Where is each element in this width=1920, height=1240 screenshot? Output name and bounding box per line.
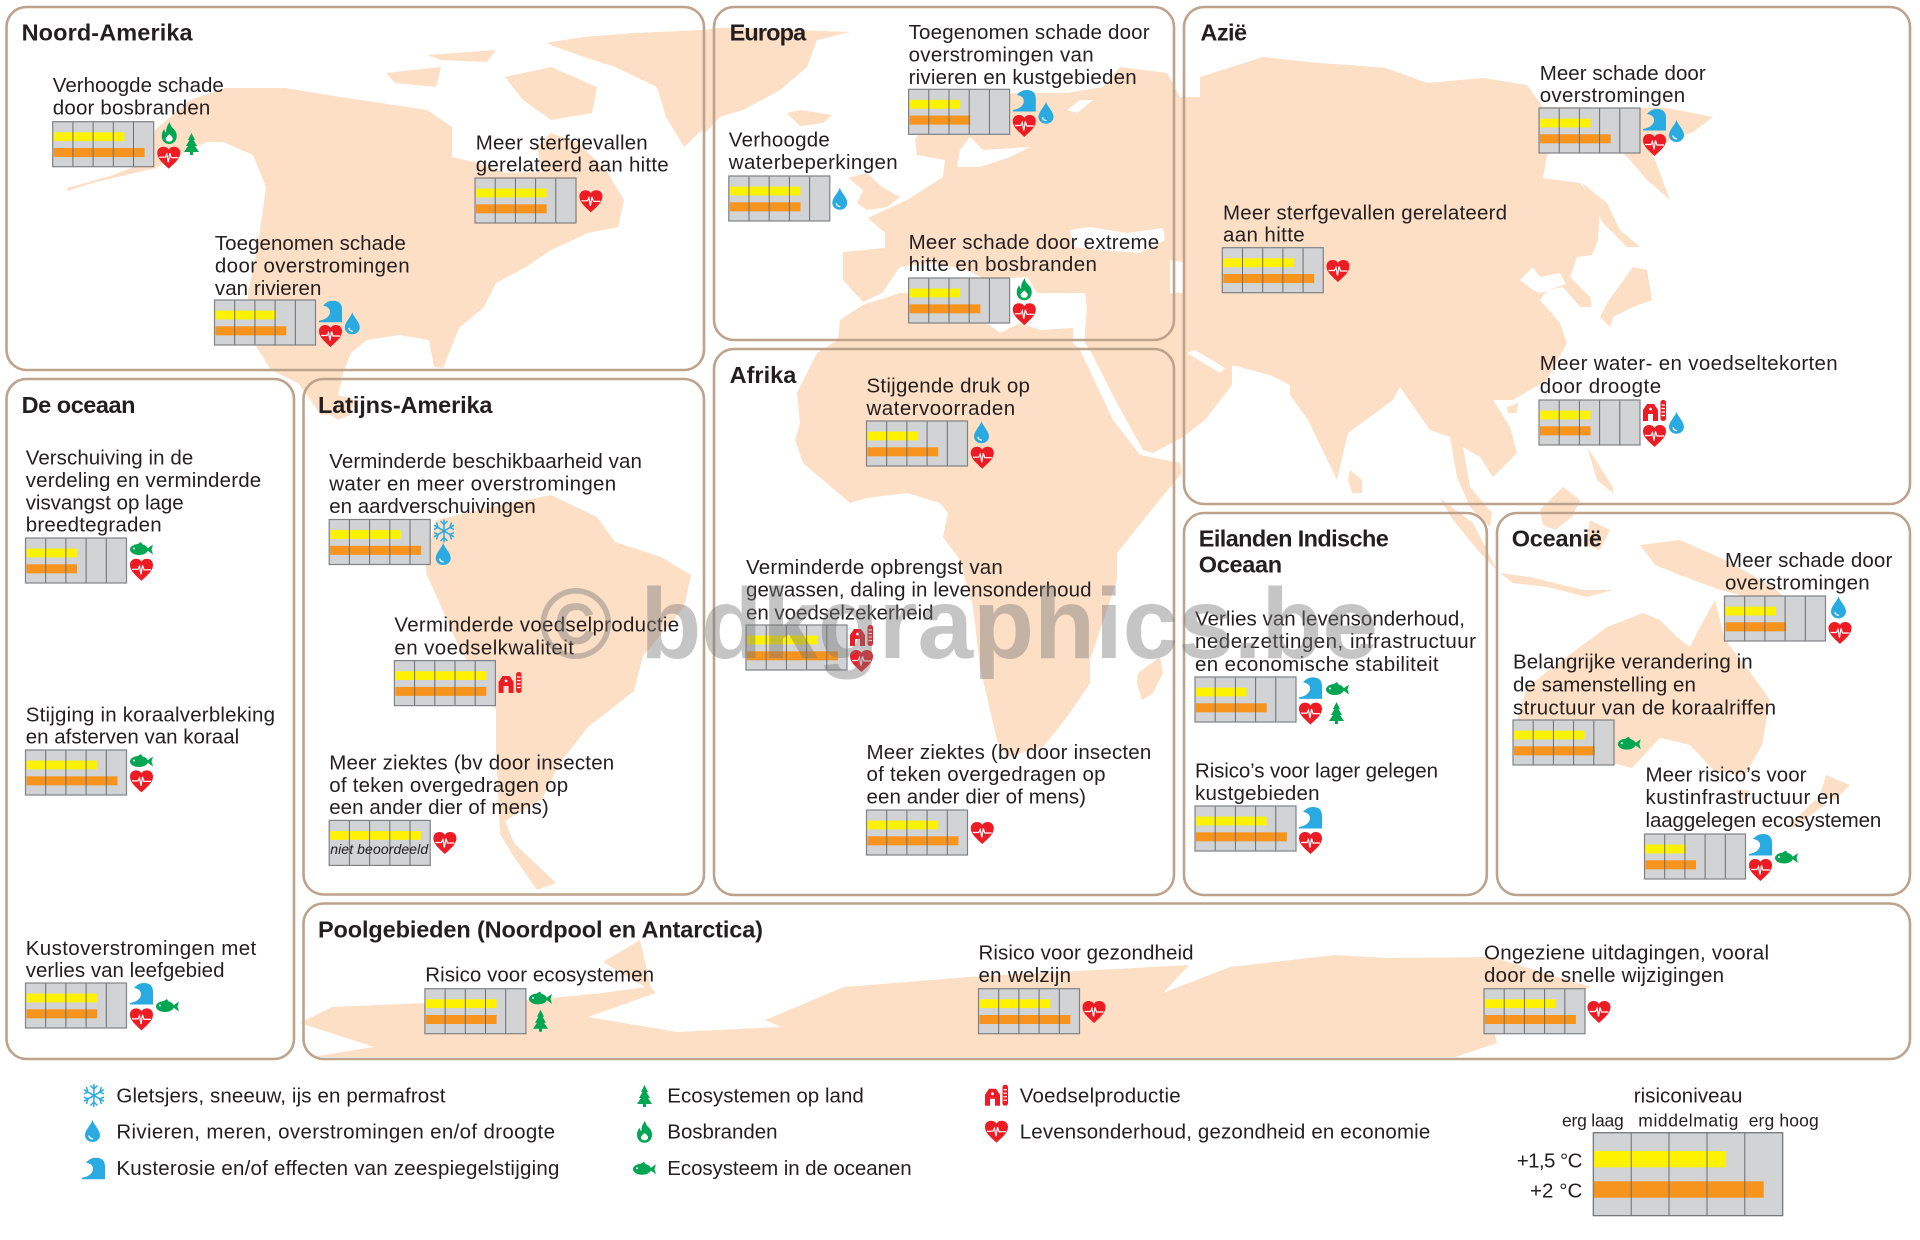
scale labels: middelmatig [1638, 1111, 1738, 1131]
text: kustinfrastructuur [1646, 763, 1881, 832]
icon: flame [637, 1121, 652, 1143]
text: hitte: gerelateerd aan hitte [476, 154, 669, 177]
chart: overstromingen [214, 300, 316, 345]
text: rivieren en kustgebieden: Toegenomen schade door [909, 21, 1150, 44]
risk item: ziektes [329, 752, 614, 865]
icon: drop [1831, 596, 1846, 618]
text: koraal: Stijging in koraalverbleking [26, 703, 275, 726]
text: visvangst: visvangst op lage [26, 491, 184, 514]
map: Arctic islands [386, 50, 597, 120]
chart: gezondheid [978, 989, 1080, 1034]
risk item: overstromingen [1724, 549, 1892, 644]
map: North America [67, 88, 624, 420]
chart: opbrengst van gewassen [746, 625, 847, 670]
text: waterbeperkingen: waterbeperkingen [728, 151, 898, 174]
icon: heart [130, 559, 153, 581]
icon: heart [1588, 1001, 1610, 1023]
icon: drop [974, 421, 989, 443]
text: bosbranden: door bosbranden [53, 97, 210, 120]
risk item: kustinfrastructuur [1644, 763, 1881, 881]
text: overstromingen: Meer schade door [1725, 549, 1892, 572]
text: overstromingen [215, 232, 410, 300]
text: kustgebieden [1195, 759, 1438, 805]
icon: heart [157, 147, 180, 169]
text: overstromingen: van rivieren [215, 277, 321, 300]
icon: fish [1618, 737, 1641, 750]
text: watervoorraden: Stijgende druk op [866, 374, 1030, 397]
map: Iceland and United Kingdom [787, 110, 900, 210]
icon: heart [971, 822, 994, 844]
text: overstromingen: overstromingen [1725, 572, 1870, 595]
legend label: Levensonderhoud, gezondheid en economie [1020, 1121, 1430, 1144]
icon: heart [319, 325, 342, 347]
scale labels: erg hoog [1749, 1111, 1819, 1131]
risk item: kustoverstromingen [26, 937, 256, 1030]
icon: wave [1013, 90, 1036, 112]
text: kustinfrastructuur: Meer risico’s voor [1646, 763, 1807, 786]
panel: De oceaan [6, 379, 294, 1059]
panel: Azië [1184, 7, 1910, 504]
icon: drop [1038, 102, 1054, 124]
icon: farm [1643, 400, 1666, 421]
legend title: risiconiveau [1634, 1085, 1742, 1108]
risk item: bosbranden [53, 74, 224, 169]
map: Greenland [546, 28, 850, 147]
chart: ziektes [329, 820, 430, 865]
risk item: koraalriffen [1513, 650, 1776, 765]
heading: Eilanden Indische Oceaan: Eilanden Indische [1199, 525, 1389, 551]
text: beschikbaarheid water: Verminderde beschikbaarheid van [329, 450, 642, 473]
text: gezondheid [978, 942, 1194, 987]
text: uitdagingen: Ongeziene uitdagingen, vooral [1484, 942, 1769, 964]
text: extreme hitte [909, 231, 1159, 276]
text: extreme hitte: Meer schade door extreme [909, 231, 1159, 254]
text: ziektes: of teken overgedragen op [329, 774, 568, 797]
risk item: visvangst [26, 447, 261, 583]
icon: snowflake [84, 1084, 104, 1107]
icon: heart [1326, 260, 1350, 282]
text: beschikbaarheid water: en aardverschuivingen [329, 495, 536, 518]
heading: Azië: Azië [1200, 20, 1247, 46]
risk item: hitte [1222, 201, 1507, 293]
icon: heart [1643, 134, 1666, 156]
icon: heart [579, 190, 602, 212]
chart: hitte [1222, 248, 1323, 293]
chart: ziektes [866, 810, 968, 855]
chart: waterbeperkingen [729, 176, 830, 221]
icon: heart [1749, 859, 1772, 881]
map: Indonesia and New Guinea [1440, 487, 1800, 610]
icon: flame [1017, 278, 1032, 300]
chart: overstromingen [1724, 596, 1826, 641]
map: inland seas [957, 100, 1566, 373]
scale labels [1562, 1111, 1819, 1131]
chart: extreme hitte [909, 278, 1010, 323]
text: opbrengst van gewassen: en voedselzekerheid [746, 601, 934, 624]
panel: Noord-Amerika [6, 7, 704, 370]
text: waterbeperkingen [728, 129, 898, 174]
text: watervoorraden: watervoorraden [866, 397, 1015, 420]
risk item: overstromingen [1539, 62, 1706, 156]
icon: wave [1299, 677, 1322, 699]
map: Eurasia [843, 57, 1713, 527]
text: overstromingen: door overstromingen [215, 254, 410, 277]
text: voedselproductie: Verminderde voedselproductie [394, 614, 679, 637]
icon: drop [1669, 412, 1684, 434]
text: kustinfrastructuur: laaggelegen ecosystemen [1646, 809, 1881, 832]
heading: Poolgebieden: Poolgebieden (Noordpool en Antarctica) [318, 917, 763, 943]
risk item: water- en voedseltekorten [1539, 352, 1838, 447]
risk item: watervoorraden [866, 374, 1030, 469]
text: hitte [1223, 201, 1507, 247]
chart: kustgebieden [1195, 806, 1296, 851]
text: visvangst: Verschuiving in de [26, 447, 193, 470]
text: koraalriffen: structuur van de koraalriffen [1513, 696, 1776, 719]
icon: drop [85, 1120, 100, 1142]
chart: koraal [26, 750, 126, 795]
legend chart [1593, 1133, 1783, 1216]
text: koraal [26, 703, 275, 749]
heading: Europa: Europa [730, 20, 807, 46]
chart: beschikbaarheid water [329, 520, 430, 564]
chart: kustoverstromingen [26, 983, 126, 1028]
chart: watervoorraden [866, 421, 968, 466]
text: water- en voedseltekorten: door droogte [1540, 375, 1661, 398]
chart: voedselproductie [394, 661, 495, 706]
text: overstromingen: Toegenomen schade [215, 232, 406, 255]
panel: Europa [714, 7, 1174, 340]
text: overstromingen: Meer schade door [1540, 62, 1706, 85]
text: beschikbaarheid water [328, 450, 642, 518]
text: voedselproductie: en voedselkwaliteit [394, 636, 574, 659]
icon: heart [1013, 303, 1036, 325]
heading: Latijns-Amerika: Latijns-Amerika [318, 392, 493, 418]
text: ecosystemen: Risico voor ecosystemen [425, 964, 654, 986]
risk item: ecosystemen [425, 964, 654, 1034]
text: koraalriffen: Belangrijke verandering in [1513, 650, 1753, 674]
chart: koraalriffen [1513, 720, 1614, 765]
text: ziektes: een ander dier of mens) [866, 786, 1086, 809]
icon: fish [130, 754, 153, 767]
text: opbrengst van gewassen: gewassen, daling in levensonderhoud [746, 578, 1092, 601]
chart: ecosystemen [425, 989, 526, 1034]
map: Australia and New Zealand [1517, 600, 1850, 830]
icon: drop [832, 188, 847, 210]
panel: Poolgebieden [304, 904, 1910, 1059]
heading: Eilanden Indische Oceaan [1199, 525, 1389, 578]
text: hitte: Meer sterfgevallen [476, 131, 648, 154]
text: kustinfrastructuur: kustinfrastructuur en [1646, 786, 1840, 809]
text: opbrengst van gewassen [746, 556, 1092, 624]
text: koraal: en afsterven van koraal [26, 726, 239, 749]
text: bosbranden [53, 74, 224, 120]
text: ziektes: of teken overgedragen op [866, 763, 1106, 786]
icon: tree [1329, 702, 1344, 724]
chart: uitdagingen [1484, 989, 1585, 1034]
text: rivieren en kustgebieden: overstromingen van [909, 44, 1094, 67]
risk item: hitte [475, 131, 669, 223]
icon: heart [130, 770, 153, 792]
text: gezondheid: en welzijn [978, 964, 1071, 987]
text: levensonderhoud: Verlies van levensonderhoud, [1195, 608, 1465, 631]
risk item: uitdagingen [1484, 942, 1769, 1034]
icon: drop [345, 312, 360, 334]
risk item: ziektes [866, 741, 1151, 855]
risk item: beschikbaarheid water [328, 450, 642, 565]
map: Antarctica [300, 940, 1591, 1057]
icon: heart [985, 1121, 1008, 1143]
risk item: extreme hitte [909, 231, 1159, 325]
chart: hitte [475, 178, 576, 223]
chart: kustinfrastructuur [1644, 834, 1746, 879]
risk item: kustgebieden [1195, 759, 1438, 854]
chart: bosbranden [53, 122, 154, 167]
icon: farm [850, 625, 873, 646]
text: kustoverstromingen: Kustoverstromingen met [26, 937, 256, 960]
icon: wave [319, 301, 342, 322]
legend: systems [82, 1084, 1430, 1180]
icon: fish [130, 542, 153, 555]
risk item: voedselproductie [394, 614, 679, 706]
icon: heart [433, 832, 456, 854]
icon: fish [1775, 850, 1798, 864]
icon: flame [162, 122, 177, 144]
text: koraalriffen: de samenstelling en [1513, 674, 1696, 696]
temperature labels [1517, 1149, 1583, 1202]
text: beschikbaarheid water: water en meer overstromingen [328, 472, 616, 496]
map: Madagascar [1137, 657, 1163, 700]
chart: levensonderhoud [1195, 677, 1296, 722]
text: bosbranden: Verhoogde schade [53, 74, 224, 97]
chart: visvangst [26, 538, 126, 583]
text: water- en voedseltekorten: Meer water- en voedseltekorten [1540, 352, 1838, 375]
text: levensonderhoud: nederzettingen, infrastructuur [1195, 630, 1476, 653]
legend label: Gletsjers, sneeuw, ijs en permafrost [116, 1084, 446, 1107]
chart: overstromingen [1539, 108, 1640, 153]
text: ziektes: Meer ziektes (bv door insecten [329, 752, 614, 775]
text: visvangst: verdeling en verminderde [26, 469, 261, 492]
temperature labels: +1,5 °C [1517, 1149, 1583, 1172]
icon: drop [436, 543, 451, 565]
icon: wave [130, 983, 153, 1004]
icon: farm [499, 672, 522, 693]
chart: rivieren en kustgebieden [909, 89, 1010, 134]
icon: fish [1326, 682, 1349, 695]
watermark: © bdkgraphics.be [539, 568, 1378, 680]
legend label: Ecosysteem in de oceanen [667, 1157, 912, 1180]
text: watervoorraden [866, 374, 1030, 420]
icon: farm [985, 1085, 1008, 1106]
text: kustoverstromingen [26, 937, 256, 982]
text: rivieren en kustgebieden: rivieren en kustgebieden [909, 66, 1137, 89]
heading: Afrika: Afrika [730, 362, 797, 388]
text: opbrengst van gewassen: Verminderde opbrengst van [746, 556, 1003, 579]
risk item: waterbeperkingen [728, 129, 898, 221]
risk item: koraal [26, 703, 275, 795]
risk item: rivieren en kustgebieden [909, 21, 1150, 137]
icon: fish [529, 991, 552, 1004]
legend: risk level scale [1517, 1085, 1819, 1216]
text: levensonderhoud: en economische stabiliteit [1195, 653, 1439, 676]
icon: heart [1299, 703, 1322, 725]
map: Africa [795, 293, 1182, 757]
text: overstromingen [1725, 549, 1892, 595]
map: Japan, Sakhalin, Philippines and Sri Lanka [1348, 183, 1652, 493]
temperature labels: +2 °C [1530, 1179, 1582, 1202]
legend label: Kusterosie en/of effecten van zeespiegelstijging [116, 1157, 559, 1180]
icon: tree [533, 1010, 548, 1032]
icon: wave [82, 1158, 105, 1179]
risk item: opbrengst van gewassen [746, 556, 1092, 672]
panel: Afrika [714, 349, 1174, 895]
icon: wave [1643, 109, 1666, 130]
legend label: Ecosystemen op land [667, 1084, 864, 1107]
icon: fish [156, 999, 179, 1012]
text: water- en voedseltekorten [1540, 352, 1838, 398]
panel: Eilanden Indische Oceaan [1184, 513, 1487, 895]
icon: tree [184, 133, 199, 155]
text: ziektes: Meer ziektes (bv door insecten [866, 741, 1151, 764]
icon: heart [1299, 832, 1322, 854]
risk item: overstromingen [214, 232, 410, 347]
icon: tree [637, 1085, 652, 1107]
legend label: Bosbranden [667, 1121, 778, 1144]
icon: snowflake [434, 520, 454, 542]
icon: drop [1669, 120, 1684, 142]
map: South America [425, 495, 691, 890]
text: overstromingen [1540, 62, 1706, 107]
text: visvangst [26, 447, 261, 537]
text: ziektes [866, 741, 1151, 809]
text: levensonderhoud [1195, 608, 1476, 676]
icon: heart [130, 1008, 153, 1030]
text: voedselproductie [394, 614, 679, 659]
icon: heart [850, 650, 873, 672]
icon: wave [1299, 807, 1322, 828]
text: hitte [476, 131, 669, 177]
text: extreme hitte: hitte en bosbranden [909, 253, 1097, 276]
legend label: Rivieren, meren, overstromingen en/of droogte [116, 1121, 555, 1144]
chart: ziektes: niet beoordeeld [330, 841, 429, 857]
heading: Eilanden Indische Oceaan: Oceaan [1199, 552, 1282, 578]
panel: Oceanië [1497, 513, 1910, 895]
icon: heart [1082, 1001, 1106, 1023]
text: koraalriffen [1513, 650, 1776, 719]
risk item: levensonderhoud [1195, 608, 1476, 725]
text: ziektes: een ander dier of mens) [329, 796, 549, 819]
icon: heart [1643, 425, 1666, 447]
heading: De oceaan: De oceaan [22, 392, 136, 418]
panel: Latijns-Amerika [304, 379, 704, 894]
icon: wave [1749, 834, 1772, 856]
heading: Noord-Amerika: Noord-Amerika [22, 20, 194, 46]
heading: Oceanië: Oceanië [1512, 525, 1602, 551]
text: kustgebieden: Risico’s voor lager gelegen [1195, 759, 1438, 782]
icon: heart [1828, 622, 1852, 644]
text: kustgebieden: kustgebieden [1195, 782, 1320, 805]
world map background [67, 28, 1850, 1057]
chart: water- en voedseltekorten [1539, 400, 1640, 445]
text: hitte: aan hitte [1223, 224, 1305, 247]
icon: heart [1013, 115, 1036, 137]
icon: fish [633, 1162, 656, 1175]
legend label: Voedselproductie [1020, 1084, 1181, 1107]
text: waterbeperkingen: Verhoogde [729, 129, 830, 152]
text: visvangst: breedtegraden [26, 514, 162, 537]
risk item: gezondheid [978, 942, 1194, 1034]
text: ziektes [329, 752, 614, 819]
icon: heart [971, 447, 994, 469]
text: uitdagingen [1484, 942, 1769, 987]
text: overstromingen: overstromingen [1540, 84, 1685, 107]
text: kustoverstromingen: verlies van leefgebied [26, 959, 225, 982]
text: rivieren en kustgebieden [909, 21, 1150, 89]
scale labels: erg laag [1562, 1111, 1624, 1131]
text: uitdagingen: door de snelle wijzigingen [1484, 964, 1724, 987]
text: hitte: Meer sterfgevallen gerelateerd [1223, 201, 1507, 224]
text: gezondheid: Risico voor gezondheid [978, 942, 1194, 964]
